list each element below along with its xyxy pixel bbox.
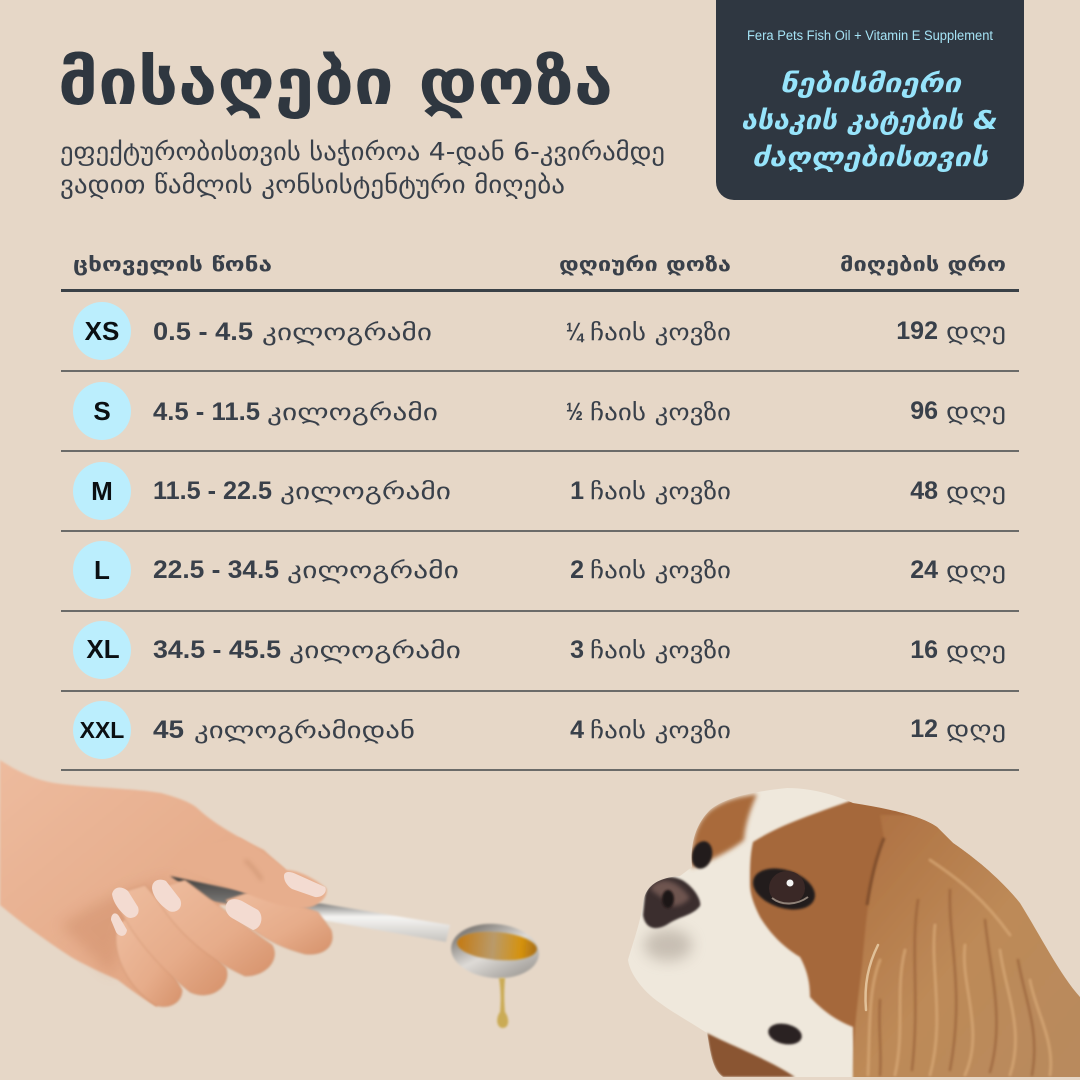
thumb knuckle crease (245, 860, 262, 880)
row: M: ჩაის კოვზი (590, 479, 731, 505)
row: XL: დღე (946, 638, 1006, 664)
far eye (692, 840, 714, 870)
row: XS (73, 302, 1006, 360)
row: XS: ჩაის კოვზი (590, 320, 731, 346)
spoon handle (170, 876, 450, 942)
row: S: 4.5 - 11.5 (153, 398, 260, 426)
finger nails (111, 872, 326, 936)
ear fold line (867, 838, 884, 905)
badge heading: ასაკის კატების & (741, 106, 998, 136)
row: L: ჩაის კოვზი (590, 558, 731, 584)
row: L: დღე (946, 558, 1006, 584)
row: M: კილოგრამი (280, 479, 451, 505)
row: XS: 0.5 - 4.5 (153, 318, 253, 346)
under-chin fur (707, 1033, 795, 1077)
muzzle shading (644, 929, 692, 961)
row: L: L (94, 555, 110, 585)
mouth corner (766, 1021, 804, 1047)
row: XS: ¼ (566, 318, 585, 346)
pinky finger (116, 915, 182, 1007)
row: S: S (93, 396, 111, 426)
row: S: კილოგრამი (267, 400, 438, 426)
ear (853, 815, 1080, 1080)
row: L: 24 (910, 556, 938, 584)
brown face patch (748, 800, 1018, 1068)
table header (73, 252, 1006, 276)
row: S: ჩაის კოვზი (590, 400, 731, 426)
row: XL: ჩაის კოვზი (590, 638, 731, 664)
row: M: დღე (946, 479, 1006, 505)
row: L: კილოგრამი (287, 558, 459, 584)
row: XXL: 4 (570, 716, 584, 744)
table header: ცხოველის წონა (73, 252, 272, 276)
row: L: 2 (570, 556, 584, 584)
row: XS: 192 (896, 317, 938, 345)
row: XS: კილოგრამი (262, 320, 432, 346)
palm shading (60, 876, 175, 975)
oil in spoon (456, 929, 538, 963)
illustration: dog (620, 780, 1080, 1080)
badge heading: ძაღლებისთვის (752, 143, 988, 173)
row: M: 48 (910, 477, 938, 505)
badge heading: ნებისმიერი (780, 69, 963, 99)
ear fur strands (866, 860, 1051, 1075)
panel: product badge (716, 0, 1024, 200)
row: XL: 34.5 - 45.5 (153, 636, 281, 664)
middle finger (152, 880, 274, 976)
left forehead patch (692, 794, 757, 868)
row: L: 22.5 - 34.5 (153, 556, 279, 584)
row: S: ½ (566, 398, 583, 426)
row: XS: XS (85, 316, 119, 346)
subtitle (60, 137, 665, 199)
title: მისაღები დოზა (58, 46, 613, 120)
spoon bowl (449, 920, 541, 982)
row: XXL: 12 (910, 715, 938, 743)
oil drip (497, 978, 508, 1028)
row: XXL: დღე (946, 717, 1006, 743)
row: M: 1 (570, 477, 584, 505)
product name: Fera Pets Fish Oil + Vitamin E Supplement (747, 28, 993, 43)
row: XXL: 45 (153, 716, 184, 744)
table header: დღიური დოზა (559, 252, 731, 276)
row: XXL (73, 701, 1006, 759)
index finger (226, 890, 332, 954)
subtitle: ეფექტურობისთვის საჭიროა 4-დან 6-კვირამდე (60, 137, 665, 166)
row: XL (73, 621, 1006, 679)
row: XXL: XXL (80, 717, 124, 743)
nose (643, 877, 700, 928)
row: XS: დღე (946, 319, 1006, 345)
row: S: დღე (946, 399, 1006, 425)
white coat (628, 788, 854, 1077)
subtitle: ვადით წამლის კონსისტენტური მიღება (60, 170, 565, 199)
ring finger (113, 885, 227, 995)
badge heading (741, 69, 998, 173)
illustration: hand holding spoon (0, 760, 541, 1028)
row: XXL: ჩაის კოვზი (590, 718, 731, 744)
row: M (73, 462, 1006, 520)
row: M: M (91, 476, 113, 506)
row: S (73, 382, 1006, 440)
row: M: 11.5 - 22.5 (153, 477, 272, 505)
thumb (170, 838, 327, 908)
palm (0, 760, 300, 1007)
row: XL: 3 (570, 636, 584, 664)
row: XXL: კილოგრამიდან (194, 718, 415, 744)
row: XL: კილოგრამი (289, 638, 461, 664)
row: XL: XL (86, 634, 120, 664)
row: S: 96 (910, 397, 938, 425)
near eye (752, 866, 816, 912)
table header: მიღების დრო (840, 252, 1006, 276)
row: L (73, 541, 1006, 599)
row: XL: 16 (910, 636, 938, 664)
